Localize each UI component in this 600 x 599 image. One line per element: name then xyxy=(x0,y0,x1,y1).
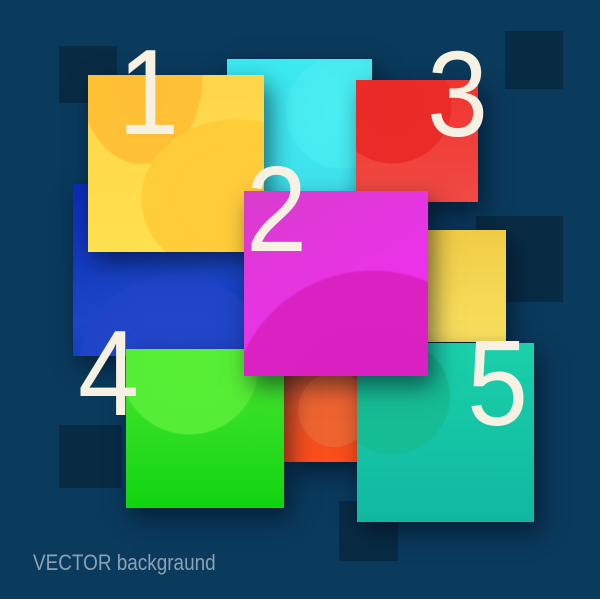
dark square bottom xyxy=(339,501,398,561)
square: yellow 1 xyxy=(88,75,264,252)
number 1: 1 xyxy=(118,24,179,160)
dark square top-right xyxy=(505,31,563,89)
number 5: 5 xyxy=(467,315,528,451)
number 3: 3 xyxy=(427,26,488,162)
number 4: 4 xyxy=(78,305,139,441)
square: orange xyxy=(284,375,385,462)
caption text: VECTOR backgraund xyxy=(33,550,216,575)
square: cyan xyxy=(227,59,372,191)
square: blue xyxy=(73,184,245,356)
dark square bottom-left xyxy=(59,425,122,488)
square: green xyxy=(126,349,284,508)
square: red xyxy=(356,80,478,202)
dark square top-left xyxy=(59,46,117,103)
dark square right xyxy=(476,216,563,302)
square: teal xyxy=(357,343,534,522)
square: magenta xyxy=(244,191,428,376)
number 2: 2 xyxy=(246,141,307,277)
square: yellow 2 xyxy=(428,230,506,342)
